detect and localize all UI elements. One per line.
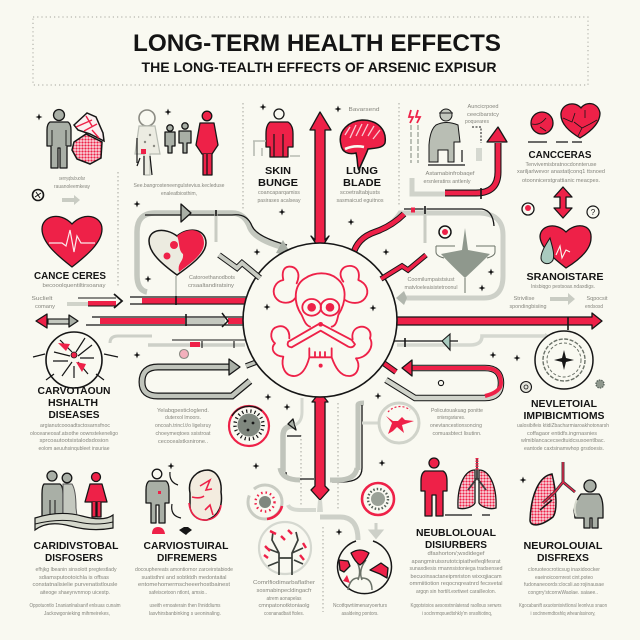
arrow: long right arrow	[388, 313, 602, 330]
icon: numbered circle	[32, 190, 44, 200]
left horizontal arrows	[36, 294, 262, 396]
subtitle: THE LONG-TEALTH EFFECTS OF ARSENIC EXPISUR	[142, 59, 496, 75]
text: footnote: lasvhirsbanbinking s ueoninaling.	[149, 611, 221, 617]
icon: speckled woman	[135, 110, 160, 175]
text: body	[253, 580, 315, 617]
heading: DISFREXS	[537, 552, 589, 564]
arrow: gray thin lines	[110, 336, 246, 348]
connector	[175, 276, 177, 296]
text: body: efhjkg lbeanin sinsolott pregtestlady	[36, 567, 117, 573]
icon: tree circle	[259, 522, 311, 575]
icon: gauge lines	[411, 125, 418, 163]
heading	[144, 540, 229, 564]
text: footnote: Jackowgonieking mihmeirekes,	[44, 611, 110, 617]
text: center left block: Yelabqpesticloglend.	[157, 408, 209, 414]
icon: hearts	[528, 104, 600, 142]
text: body	[30, 423, 118, 452]
text: upper note: ceecibarstcy	[467, 112, 499, 118]
panel: seated person	[409, 104, 507, 199]
text: caption: asaldeing pontors.	[342, 611, 378, 617]
text: body: sdiamsputootoichla is offsas	[39, 575, 109, 581]
arrow: left arch	[137, 204, 292, 292]
text: caption	[258, 190, 301, 204]
panel: neurolouial	[519, 462, 607, 617]
text: center left block: oncoah.trincl.t/o ligelsruy	[155, 423, 211, 429]
icon: skull and crossbones	[271, 266, 371, 376]
text: caption	[134, 183, 225, 197]
text: footnote: Oppotuontlo 1nanianlnalsanif enlsuas cunaim	[30, 603, 120, 609]
text: body: suatisthni and sobtktdh medontaital	[142, 575, 226, 581]
text: caption: pasirases acalseay	[258, 198, 301, 204]
heading: NEUBLOLOUAL	[416, 527, 497, 539]
text: body: ommiitiotion reqocnqreatnrd fecsvetal	[410, 581, 502, 587]
arrow: central up arrow	[310, 112, 331, 250]
arrow: double arrow	[36, 314, 78, 328]
text: center right block: onevtancestionsoncing	[430, 423, 482, 429]
title frame	[33, 17, 588, 85]
text: body: entomehomermscheeerhostbainest	[138, 582, 231, 588]
panel: right star icon	[404, 226, 495, 293]
text: left note: spondingbisiing	[510, 304, 547, 310]
text: body: Inisbiqgo pestsoax.ndaxdigs.	[531, 284, 595, 290]
heading	[258, 165, 298, 189]
text: footnote: Kgocabanift axuotontoivtlional Ieonlvus snaon	[519, 603, 607, 609]
icon: ECG heart	[42, 216, 102, 267]
arrow: right U arrow	[382, 360, 501, 398]
text: body: eantode caxtsinamwhop grsdoesis.	[524, 446, 604, 452]
heading	[524, 398, 604, 422]
arrow: red bolt	[381, 255, 426, 279]
arrow: long left bar	[86, 313, 252, 327]
text: footnote	[30, 603, 120, 617]
text: body	[524, 567, 604, 596]
text: right note: Sqpocsit	[586, 296, 608, 302]
label: top note: Bavarsend	[348, 107, 380, 113]
heading: CANCE CERES	[34, 270, 106, 282]
icon: lungs and trachea	[530, 462, 575, 525]
text: footnote: i soclnrmqouedtohkly'm onsoltiotinq,	[422, 611, 492, 617]
text: caption: Ncotfqwrtiimenaryoerturs	[333, 603, 387, 609]
heading: CARVIOSTUIRAL	[144, 540, 229, 552]
arrow: gray upper right	[393, 333, 552, 350]
icon: question circle	[587, 206, 599, 218]
text: body: crsaaltandiratsiny	[188, 283, 234, 289]
arrow: right arch	[353, 206, 503, 305]
icon: gray person	[146, 469, 169, 523]
text: center right block: ontersgarianes.	[437, 415, 465, 421]
panel: left heart	[32, 216, 106, 310]
text: body: aiteoge shaeynvnrnop uicestp.	[40, 590, 110, 596]
icon: concentric circle	[535, 331, 593, 389]
icon: skin patches	[72, 113, 104, 164]
icon: red dome	[152, 527, 165, 534]
icon: three people on waves	[35, 471, 113, 530]
text: body: eaeinoicoornrest cint.poteo	[535, 575, 593, 581]
heading	[416, 527, 497, 551]
panel: skin person	[47, 110, 104, 190]
heading: DIFREMERS	[157, 552, 217, 564]
text: body: otoonnicerstgrattianic meacpes.	[522, 178, 600, 184]
panel: tree	[253, 522, 315, 617]
central skull circle	[243, 243, 397, 397]
icon: brain	[340, 120, 385, 170]
panel: sranoistare	[510, 226, 608, 310]
heading	[34, 540, 119, 564]
panel: mushroom circle	[333, 541, 391, 617]
text: body: becooolquentiltirsoanay	[42, 283, 106, 289]
title: LONG-TERM HEALTH EFFECTS	[133, 30, 501, 57]
text: body: fudonaneoords:clocsli.ao:rojinausae	[524, 582, 604, 588]
text: body: cmnpatonotktoniaolg	[258, 603, 310, 609]
text: center left block	[155, 408, 211, 445]
icon: black bump	[179, 527, 192, 535]
heading: HSHALTH	[48, 397, 98, 409]
heading: SKIN	[265, 165, 291, 177]
text: body: sosmabinpecldingacfr	[256, 588, 312, 594]
text: body: coonanadbait ftoles.	[264, 611, 304, 617]
text: center right block: comuasbtect lisutinn.	[432, 431, 482, 437]
text: body: dfashorton/;wsdidegef	[428, 551, 485, 557]
heading: CANCCERAS	[528, 149, 592, 161]
text: center right block: Policutouakuag ponitte	[431, 408, 483, 414]
text: caption: See.bangrosteneengulstevius.kecleduse	[134, 183, 225, 189]
arrow: small gray	[62, 195, 80, 205]
text: left note: Strivilise	[514, 296, 535, 302]
icon: seated figure	[428, 109, 465, 165]
heading: NEVLETOIAL	[531, 398, 598, 410]
top arch arrows	[137, 204, 503, 305]
icon: question circle: ?	[591, 208, 596, 217]
icon: nerve circle	[33, 332, 118, 388]
heading: IMPIBICMTIOMS	[524, 410, 604, 422]
text: body: cloruoteocroticsug inaxidoocker	[528, 567, 600, 573]
dotted dividers	[118, 103, 399, 612]
icon: half heart	[149, 230, 206, 275]
icon: red woman	[196, 111, 218, 175]
arrow: small left arrow	[67, 294, 122, 308]
text: body: safeiscetoon ntlont, amsio..	[149, 590, 207, 596]
icon: small diamond dot	[438, 380, 444, 386]
icon: heart with drop	[540, 226, 591, 268]
text: caption	[54, 176, 90, 190]
icon: virus circle left	[229, 406, 269, 446]
text: body: sunaxdiesis rmannsistoniega tradsensed	[410, 566, 503, 572]
icon: red dot circle	[439, 226, 451, 238]
icon: red creature circle	[379, 403, 419, 443]
text: body: constatnalisielie purvenatistlousle	[32, 582, 118, 588]
icon: gray pulse shape	[441, 228, 490, 278]
icon: red dot circle	[522, 203, 534, 215]
text: footnote: i soclnnemdtoshlq wheanlssinory,	[530, 611, 596, 617]
icon: red person	[421, 458, 447, 516]
text: caption	[424, 171, 475, 185]
icon: small pink dot	[180, 350, 188, 358]
text: body: apangmiruissrutotcipiatheifeqlifesrat	[412, 559, 501, 565]
text: upper note: Auncicrpoed	[468, 104, 499, 110]
text: body: becuoinsactaneipmriston wixxqjiacam	[410, 574, 502, 580]
text: left note	[510, 296, 547, 310]
text: body: Coomilumpaistsiust	[408, 277, 455, 283]
text: body: atrem aonapelas	[266, 596, 302, 602]
arrow: upper left bar	[130, 296, 247, 306]
text: body: matvloeleaisistetroonul	[404, 285, 458, 291]
text: upper note	[465, 104, 499, 125]
heading: DISEASES	[48, 409, 100, 421]
text: body: sprcoautootsistalodsdosion	[40, 438, 109, 444]
text: center right block	[430, 408, 483, 437]
icon: mushrooms	[337, 541, 391, 594]
panel: caridivstobal	[30, 471, 120, 617]
text: body: Comrlfiodimarbaflather	[253, 580, 315, 586]
heading	[343, 165, 381, 189]
heading: BUNGE	[258, 177, 298, 189]
text: caption: ersnleratins antlenly	[424, 179, 471, 185]
text: side note: comany	[35, 304, 55, 310]
text: caption: sernyqbubuofar	[59, 176, 85, 182]
text: body: ualosibifeis ktidiZbacharmiaroakhotonarsh	[517, 423, 609, 429]
text: caption: rauanoleemkeay	[54, 184, 90, 190]
text: body: docouphereats amontiornor zarceirstabiode	[135, 567, 233, 573]
text: body	[188, 275, 235, 289]
panel: carviostuiral	[135, 469, 233, 617]
text: body: argianutcoooadtsctosarnsfnoc	[40, 423, 110, 429]
panel: persons group	[134, 110, 225, 197]
heading: SRANOISTARE	[526, 271, 604, 283]
text: footnote: useith ernoaterain then Ihniddiums	[150, 603, 221, 609]
panel: nevletoial	[517, 331, 609, 452]
heading	[38, 385, 110, 421]
text: body: coffagaor entidfs.ingrnasnies	[527, 431, 597, 437]
panel: carvotaoun	[30, 332, 118, 452]
text: body: oloceaneosaf.atsothe oownstekeneligo	[30, 431, 118, 437]
right horizontal arrows	[382, 313, 602, 398]
icon: gray suited person	[574, 480, 603, 528]
icon: small virus gray ring	[248, 485, 282, 519]
text: caption: coancaparqamiss	[258, 190, 300, 196]
heading	[524, 540, 603, 564]
text: body: congrry'stcorrwWaolae. saiaee..	[528, 590, 598, 596]
arrow: gray	[550, 293, 575, 305]
text: body	[135, 567, 233, 596]
text: caption: Astamabinfrobaqef	[426, 171, 475, 177]
heading: DISIURBERS	[425, 539, 487, 551]
text: body: eolom aeuuhsinqubleet insuriae	[38, 446, 110, 452]
icon: small gray persons	[165, 123, 191, 153]
icon: red virus circle	[362, 483, 394, 515]
text: body	[517, 162, 605, 184]
text: caption	[333, 603, 387, 617]
icon: red person	[253, 109, 300, 157]
heading: LUNG	[346, 165, 378, 177]
icon: small circle	[520, 382, 532, 392]
text: right note: endsosd	[585, 304, 603, 310]
text: body	[404, 277, 458, 291]
icon: brain white	[189, 470, 221, 520]
heading: CARIDIVSTOBAL	[34, 540, 119, 552]
text: center left block: cecocealstksnirone..	[158, 439, 208, 445]
text: center left block: choeymeqtoes ssistroat	[156, 431, 211, 437]
text: side note	[32, 296, 55, 310]
text: body: Tenvivemisbratnocdonnteruse	[526, 162, 597, 168]
icon: lungs	[445, 458, 496, 515]
panel: middle heart	[149, 230, 235, 296]
text: footnote	[519, 603, 607, 617]
text: footnote: Kgqotstoios aesoostnnlaterad raollous senwrs	[410, 603, 502, 609]
text: body: Catoroethanodbots	[189, 275, 235, 281]
panel: lung blade	[336, 107, 385, 204]
heading: BLADE	[343, 177, 381, 189]
icon: red squiggle	[409, 110, 420, 123]
text: caption	[336, 190, 384, 204]
heading: DISFOSERS	[45, 552, 103, 564]
icon: side curve	[170, 472, 181, 518]
text: side note: Suclielt	[32, 296, 53, 302]
text: body	[517, 423, 609, 452]
text: body: argqn sin hortilt.exrtiwet carailleolon.	[416, 589, 496, 595]
text: body: wlmiblancacecsedtuidcsusoentlbac.	[521, 438, 605, 444]
arrow: gray bolt	[219, 255, 260, 278]
arrow: red double arrow	[554, 187, 572, 218]
panel: skin bunge	[253, 109, 301, 204]
heading: CARVOTAOUN	[38, 385, 110, 397]
arrow: red up arrow	[412, 127, 507, 199]
text: right note	[585, 296, 608, 310]
icon: frame	[436, 246, 495, 293]
text: caption: scoetraltabjusts	[340, 190, 380, 196]
sparkles	[36, 104, 526, 536]
text: upper note: poqueares	[465, 119, 489, 125]
text: body: xariljarlwevor anastat|conq1 ttsnoed	[517, 169, 605, 175]
bolts on circle	[219, 255, 426, 279]
icon: small virus	[596, 380, 604, 388]
text: body	[32, 567, 118, 596]
arrow: left U arrow	[142, 359, 262, 396]
text: body	[410, 551, 503, 595]
arrow: central down arrow	[311, 392, 329, 512]
heading: NEUROLOUIAL	[524, 540, 603, 552]
panel: neublolotial	[410, 458, 503, 617]
text: caption: enaleatbiosthim,	[161, 191, 197, 197]
panel: canceras	[517, 104, 605, 184]
text: footnote	[149, 603, 221, 617]
icon: gray person	[47, 110, 71, 168]
text: footnote	[410, 603, 502, 617]
text: caption: sasmaicud eguitnos	[336, 198, 384, 204]
bottom trident arrows	[280, 398, 381, 540]
text: center left block: duterxol lmoors.	[165, 415, 201, 421]
